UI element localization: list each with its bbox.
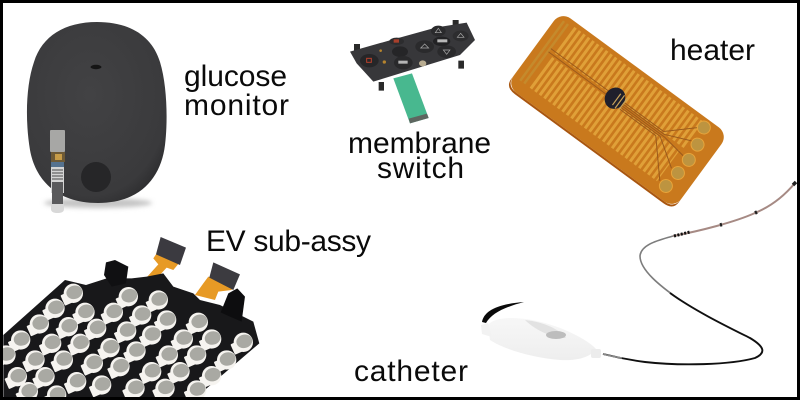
label: EV sub-assy: EV sub-assy [206, 225, 371, 258]
label: membrane switch [348, 127, 491, 185]
label: membrane switch: membrane [348, 127, 491, 160]
sensor vial [50, 130, 65, 213]
glucose monitor device [27, 22, 167, 213]
catheter electrode bands [674, 232, 690, 236]
ribbon connector tip [409, 114, 429, 123]
substrate lower edge [505, 76, 681, 210]
contact pads [654, 118, 719, 197]
plastic clips [104, 260, 128, 287]
sensor chip [600, 83, 630, 113]
gray cable exit [603, 354, 622, 358]
heater substrate [506, 11, 729, 209]
black cable segment [603, 293, 762, 364]
black tip curve [482, 302, 524, 323]
black carrier plate [3, 273, 259, 397]
switch mounting tabs [354, 20, 464, 91]
center lead traces [526, 28, 703, 183]
monitor button [81, 162, 111, 192]
EV sub-assembly device [0, 237, 259, 400]
label: heater: heater [670, 34, 755, 67]
heater device [505, 11, 729, 210]
monitor body [27, 22, 167, 203]
cable marker beads [720, 182, 796, 225]
label: membrane switch: switch [377, 152, 464, 185]
keypad body [350, 23, 475, 82]
green ribbon cable [393, 73, 429, 123]
catheter device [481, 182, 796, 364]
end-zone serpentine trace [541, 50, 549, 56]
label: catheter: catheter [354, 355, 468, 388]
upper serpentine trace [565, 40, 694, 135]
lower serpentine trace [541, 72, 668, 166]
gray cable segment [640, 236, 680, 300]
membrane switch device [350, 20, 475, 123]
shadow under monitor [44, 198, 152, 208]
pink distal cable segment [673, 183, 795, 236]
label: glucose monitor: glucose [184, 60, 287, 93]
label: glucose monitor: monitor [184, 89, 289, 122]
catheter handle [481, 318, 601, 360]
keypad buttons [360, 26, 469, 69]
orange flex tails [147, 253, 182, 277]
flex tail connectors [156, 237, 186, 265]
monitor slit [90, 65, 102, 69]
label: glucose monitor [184, 60, 289, 122]
battery cell connectors [0, 284, 254, 400]
